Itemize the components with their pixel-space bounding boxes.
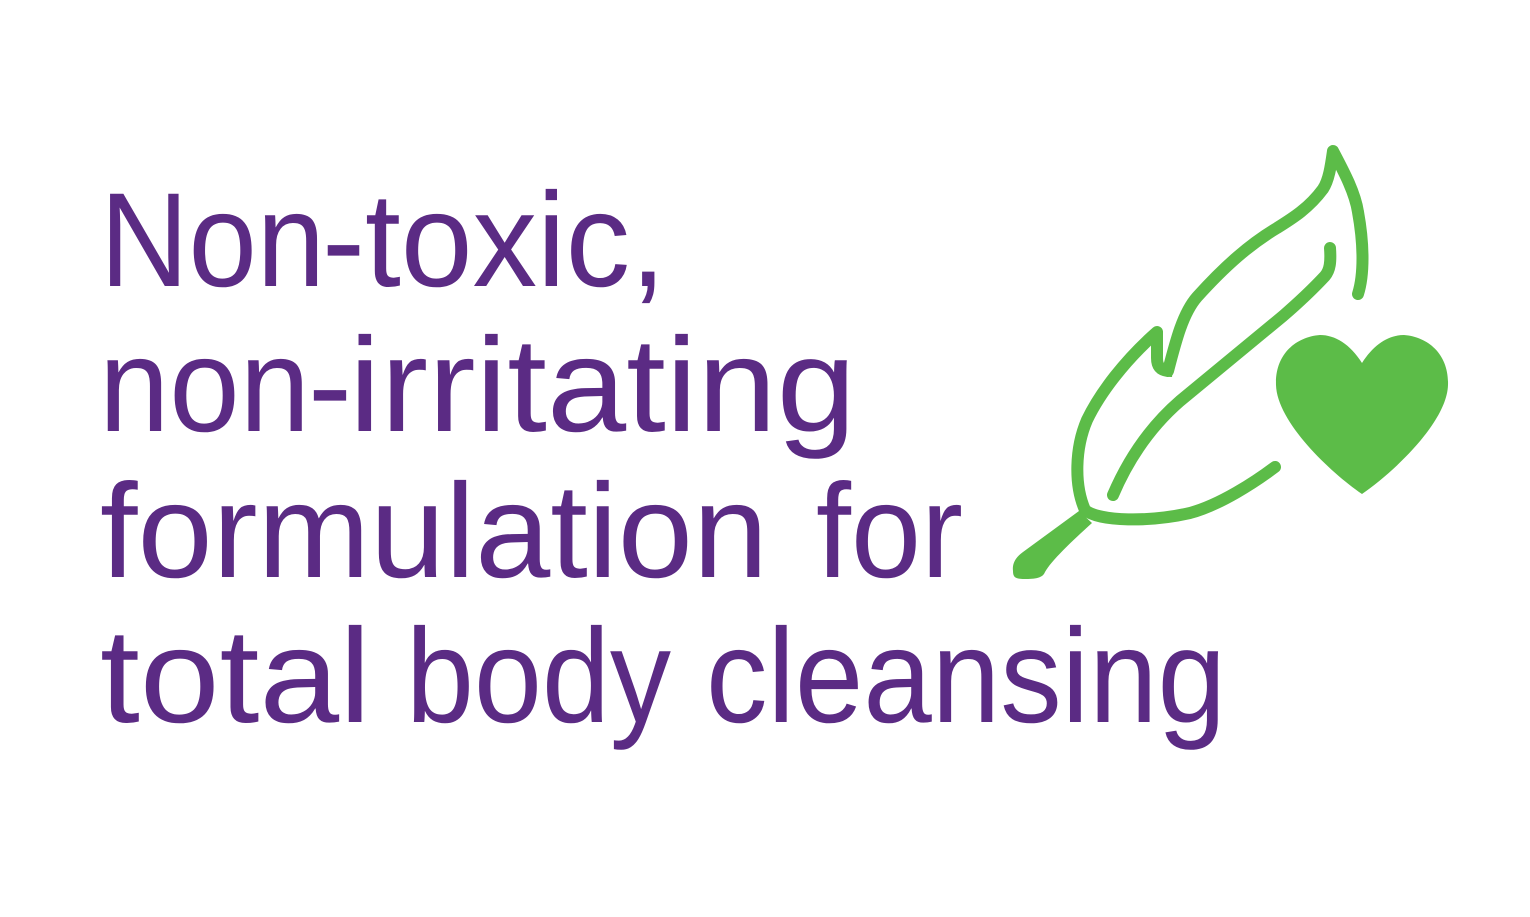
headline text: cleansing — [706, 602, 1226, 751]
headline text — [99, 166, 1226, 751]
leaf notch point — [1160, 361, 1174, 377]
headline text: non — [99, 311, 310, 460]
headline text: total — [100, 602, 371, 751]
headline text: body — [406, 602, 671, 751]
headline text: toxic, — [365, 166, 666, 315]
leaf outline — [1077, 151, 1362, 519]
headline text: Non — [100, 166, 325, 315]
leaf stem — [1013, 511, 1092, 579]
icon: leaf with heart — [1013, 151, 1448, 579]
headline text: formulation — [100, 457, 768, 606]
headline text: for — [816, 457, 963, 606]
headline text: - — [322, 166, 365, 315]
heart — [1276, 335, 1448, 494]
headline text: irritating — [349, 311, 856, 460]
headline text: - — [308, 311, 352, 460]
